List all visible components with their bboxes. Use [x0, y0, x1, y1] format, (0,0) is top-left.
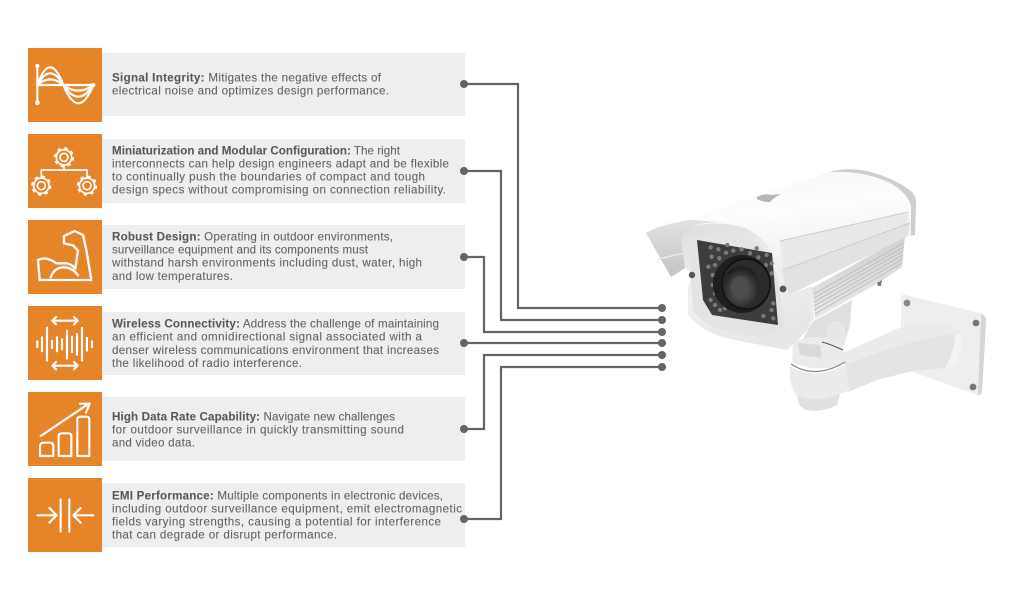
panel: wireless connectivity: [28, 306, 465, 380]
illustration: surveillance camera on wall mount: [646, 169, 986, 411]
connector: high data rate: [460, 351, 666, 433]
camera lens: [713, 255, 771, 313]
IR LEDs: [706, 243, 775, 320]
text: wireless connectivity: Wireless Connectivity: Address the challenge of maintaining: [112, 318, 439, 330]
front bezel: [681, 223, 810, 350]
panel: miniaturization: [28, 134, 465, 208]
panel: robust design: [28, 220, 465, 294]
text background: miniaturization: [102, 139, 465, 203]
panel: EMI performance: [28, 478, 465, 552]
text: EMI performance: [112, 490, 462, 542]
connector: robust design: [460, 253, 666, 336]
text background: high data rate: [102, 397, 465, 461]
text: robust design: surveillance equipment and its components must: [112, 244, 369, 256]
text: EMI performance: including outdoor surveillance equipment, emit electromagnetic: [112, 502, 462, 516]
text: signal integrity: [112, 72, 389, 98]
text: EMI performance: that can degrade or disrupt performance.: [112, 528, 337, 542]
panel: high data rate: [28, 392, 465, 466]
text: high data rate: [112, 410, 404, 450]
text: robust design: Robust Design: Operating in outdoor environments,: [112, 230, 393, 244]
swivel neck: [800, 300, 852, 345]
text background: EMI performance: [102, 483, 465, 547]
icon: arrows pressing on two bars: [28, 478, 102, 552]
text: miniaturization: [112, 144, 449, 196]
text: high data rate: for outdoor surveillance in quickly transmitting sound: [112, 424, 404, 436]
text: wireless connectivity: denser wireless communications environment that increases: [112, 344, 439, 357]
text: signal integrity: Signal Integrity: Mitigates the negative effects of: [112, 72, 382, 84]
base cylinder: [790, 362, 850, 411]
connector: miniaturization: [460, 167, 666, 324]
connector lines from panels to camera: [460, 80, 666, 523]
icon: flexed arm: [28, 220, 102, 294]
text: miniaturization: Miniaturization and Modular Configuration: The right: [112, 144, 401, 158]
connector: wireless connectivity: [460, 339, 666, 347]
text: miniaturization: design specs without compromising on connection reliability.: [112, 184, 446, 196]
swivel collar: [792, 337, 845, 368]
main housing: [660, 169, 916, 296]
text: miniaturization: to continually push the boundaries of compact and tough: [112, 170, 425, 184]
text background: wireless connectivity: [102, 312, 465, 375]
icon: sound wave with arrows: [28, 306, 102, 380]
connector: EMI performance: [460, 363, 666, 523]
icon: sine waves on orange tile: [28, 48, 102, 122]
body side panel: [785, 286, 814, 345]
top mounting screw: [757, 194, 781, 202]
text: EMI performance: EMI Performance: Multiple components in electronic devices,: [112, 490, 443, 502]
text: robust design: [111, 230, 422, 283]
text: robust design: and low temperatures.: [112, 270, 233, 283]
panel: signal integrity: [28, 48, 465, 122]
text: high data rate: High Data Rate Capability: Navigate new challenges: [112, 410, 395, 424]
housing screws: [689, 272, 786, 292]
sunshield underside: [646, 220, 722, 277]
text: high data rate: and video data.: [112, 436, 195, 450]
wall mount plate: [901, 295, 986, 395]
connector: signal integrity: [460, 80, 666, 312]
finned lower body: [785, 236, 905, 345]
mount arm: [843, 322, 963, 392]
text: wireless connectivity: an efficient and omnidirectional signal associated with a: [112, 330, 423, 344]
text: wireless connectivity: [112, 318, 439, 370]
text: EMI performance: fields varying strengths, causing a potential for interference: [112, 516, 441, 528]
inner bezel rim: [689, 234, 785, 336]
text background: robust design: [102, 225, 465, 289]
icon: three connected gears: [28, 134, 102, 208]
icon: rising bars with arrow: [28, 392, 102, 466]
text background: signal integrity: [102, 53, 465, 116]
swivel ball: [826, 321, 846, 349]
IR window: [697, 240, 778, 325]
text: wireless connectivity: the likelihood of radio interference.: [112, 357, 302, 370]
text: signal integrity: electrical noise and optimizes design performance.: [112, 84, 389, 98]
text: miniaturization: interconnects can help design engineers adapt and be flexible: [112, 158, 449, 170]
text: robust design: withstand harsh environments including dust, water, high: [111, 256, 422, 270]
